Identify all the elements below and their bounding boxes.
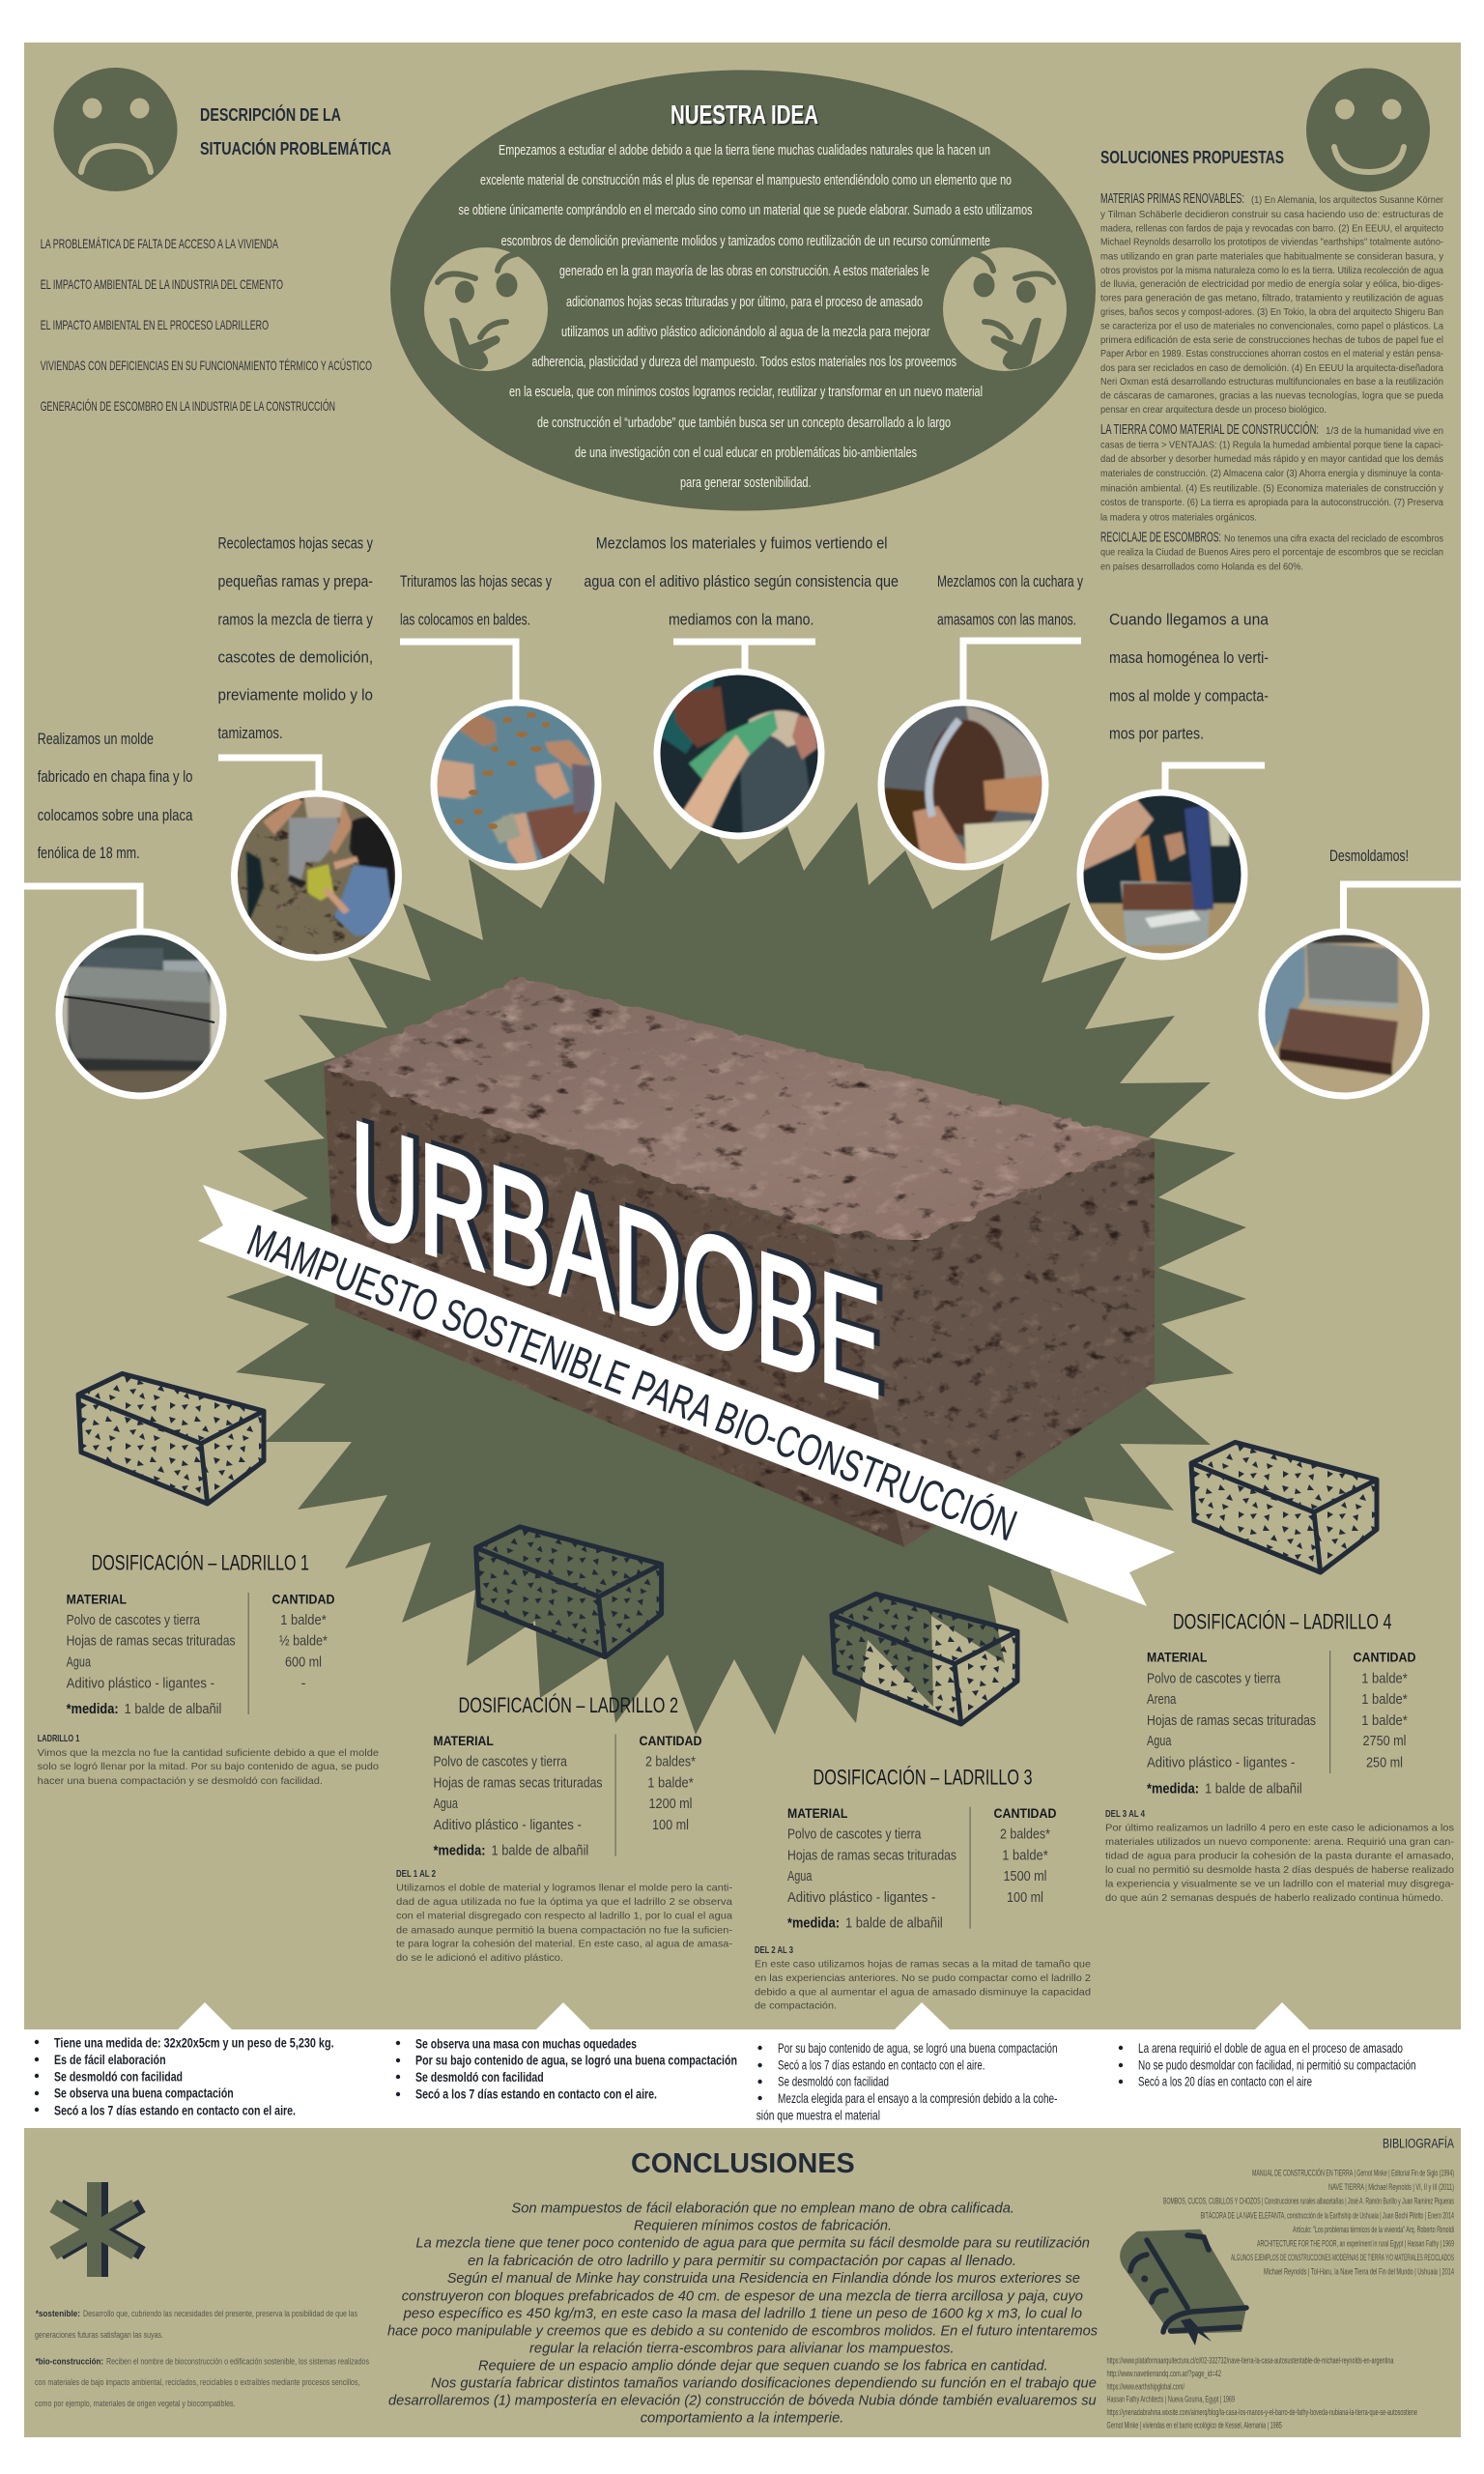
text: del 2 al 3 note	[755, 1944, 1091, 2012]
text: conclusiones body: hace poco manipulable y creemos que es debido a su contenido de escombros molidos. En el futuro intentaremos	[387, 2322, 1098, 2339]
dosage table: ladrillo 2: CANTIDAD	[640, 1733, 701, 1748]
text: del 3 al 4 note: lo cual no permitió su desmolde hasta 2 días después de haberse realizado	[1105, 1864, 1454, 1876]
starburst	[224, 801, 1246, 1735]
text: ladrillo 1 note: hacer una buena compactación y se desmoldó con facilidad.	[38, 1775, 323, 1787]
dosage table: ladrillo 1: Polvo de cascotes y tierra	[67, 1613, 201, 1628]
text: del 1 al 2 note: do se le adicionó el aditivo plástico.	[396, 1952, 563, 1964]
text: conclusiones body: Requieren mínimos costos de fabricación.	[634, 2217, 892, 2233]
photo 1: molde	[56, 928, 226, 1100]
text: soluciones propuestas body: que realiza la Ciudad de Buenos Aires pero el porcentaje de escombros que se reciclan	[1100, 547, 1443, 559]
dosage table: ladrillo 2: DOSIFICACIÓN – LADRILLO 2	[458, 1693, 678, 1717]
photo 6: compactado en molde	[1076, 789, 1248, 961]
text: del 1 al 2 note: de amasado aunque permitió la buena compactación no fue la suficien-	[396, 1924, 733, 1936]
text: soluciones propuestas body: casas de tierra > VENTAJAS: (1) Regula la humedad ambiental porque tiene la capaci-	[1100, 440, 1443, 451]
dosage table: ladrillo 1: ½ balde*	[279, 1634, 328, 1650]
bullet list 4	[1119, 2040, 1416, 2089]
bullet list 1: Se observa una buena compactación	[54, 2086, 234, 2101]
text: soluciones propuestas body: otros provistos por la misma naturaleza como lo es la tierra. Utiliza recolección de agua	[1100, 265, 1443, 276]
text: soluciones propuestas body: tores para generación de gas metano, filtrado, tratamiento y reutilización de aguas	[1100, 292, 1443, 303]
dosage table: ladrillo 1	[67, 1550, 334, 1717]
text: soluciones propuestas body: dad de absorber y desorber humedad más rápido y en mayor cantidad que los demás	[1100, 453, 1443, 465]
step 1 text: realizamos un molde: fabricado en chapa fina y lo	[38, 767, 193, 786]
list of problems	[41, 236, 372, 414]
dosage table: ladrillo 2: Aditivo plástico - ligantes -	[433, 1818, 582, 1833]
text: soluciones propuestas body: y Tilman Schäberle decidieron construir su casa haciendo uso de: estructuras de	[1100, 209, 1443, 220]
dosage table: ladrillo 1: 600 ml	[285, 1655, 322, 1671]
bullet list 2	[396, 2035, 737, 2102]
heading: descripción de la situación problemática: SITUACIÓN PROBLEMÁTICA	[200, 138, 391, 158]
text: del 3 al 4 note: Por último realizamos un ladrillo 4 pero en este caso le adicionamos a los	[1105, 1823, 1454, 1834]
step 6 text: cuando llegamos: Cuando llegamos a una	[1109, 611, 1269, 629]
bullet list 4: Secó a los 20 días en contacto con el aire	[1138, 2074, 1312, 2089]
dosage table: ladrillo 4: 2750 ml	[1362, 1734, 1407, 1749]
heading: descripción de la situación problemática	[200, 104, 391, 158]
dosage table: ladrillo 4: Arena	[1147, 1692, 1177, 1708]
text: conclusiones body: Nos gustaría fabricar distintos tamaños variando dosificaciones dependiendo su función en el trabajo que	[431, 2374, 1097, 2391]
icon: book	[1120, 2229, 1246, 2345]
dosage table: ladrillo 4: CANTIDAD	[1353, 1650, 1416, 1665]
icon: brick 1	[78, 1373, 264, 1504]
photo 7: desmolde	[1258, 928, 1430, 1100]
dosage table: ladrillo 1: CANTIDAD	[271, 1591, 334, 1606]
text: del 3 al 4 note: tidad de agua para producir la cohesión de la pasta durante el amasado,	[1105, 1851, 1454, 1862]
text: conclusiones body: Son mampuestos de fácil elaboración que no emplean mano de obra calificada.	[511, 2200, 1014, 2216]
list of problems: LA PROBLEMÁTICA DE FALTA DE ACCESO A LA VIVIENDA	[41, 236, 278, 251]
text: conclusiones body: comportamiento a la intemperie.	[641, 2410, 843, 2427]
text: conclusiones body: regular la relación tierra-escombros para alivianar los mampuestos.	[529, 2340, 955, 2356]
heading: bibliografía: BIBLIOGRAFÍA	[1383, 2137, 1454, 2151]
text: conclusiones body: desarrollaremos (1) mampostería en elevación (2) construcción de bóveda Nubia dónde también evaluaremos su	[388, 2393, 1097, 2409]
step 3 text: trituramos	[400, 572, 552, 628]
text: soluciones propuestas body	[1100, 191, 1444, 573]
web references: Hassan Fathy Architects | Nueva Gourna, Egypt | 1969	[1107, 2395, 1235, 2404]
dosage table: ladrillo 4: MATERIAL	[1147, 1650, 1208, 1665]
text: ladrillo 1 note: Vimos que la mezcla no fue la cantidad suficiente debido a que el molde	[38, 1747, 379, 1759]
text: soluciones propuestas body: costos de transporte. (6) La tierra es apropiada para la autoconstrucción. (7) Preserva	[1100, 497, 1443, 508]
dosage table: ladrillo 1: -	[301, 1676, 306, 1691]
text: nuestra idea paragraph: adherencia, plasticidad y dureza del mampuesto. Todos estos materiales nos los proveemos	[531, 355, 956, 370]
text: soluciones propuestas body: de lluvia, generación de electricidad por medio de energía solar y eólica, bio-diges-	[1100, 278, 1443, 290]
footnotes: como por ejemplo, materiales de origen vegetal y biocompatibles.	[35, 2399, 236, 2408]
text: nuestra idea paragraph: generado en la gran mayoría de las obras en construcción. A estos materiales le	[559, 264, 929, 279]
step 5 text: mezclamos con la cuchara: Mezclamos con la cuchara y	[937, 572, 1083, 590]
bullet list 3: Se desmoldó con facilidad	[778, 2074, 889, 2089]
dosage table: ladrillo 3: CANTIDAD	[993, 1805, 1057, 1821]
step 1 text: realizamos un molde: Realizamos un molde	[38, 730, 154, 748]
text: soluciones propuestas body: primera edificación de esta serie de construcciones hechas de tubos de papel fue el	[1100, 334, 1443, 346]
dosage table: ladrillo 3: MATERIAL	[787, 1805, 848, 1821]
dosage table: ladrillo 3	[787, 1765, 1057, 1932]
text: nuestra idea paragraph: adicionamos hojas secas trituradas y por último, para el proceso de amasado	[566, 295, 923, 310]
footnotes: *bio-construcción:	[36, 2357, 103, 2367]
bullet list 3: Por su bajo contenido de agua, se logró una buena compactación	[778, 2040, 1057, 2056]
text: del 3 al 4 note: DEL 3 AL 4	[1105, 1808, 1145, 1820]
title: urbadobe	[351, 1084, 887, 1431]
step 2 text: recolectamos: Recolectamos hojas secas y	[218, 534, 373, 553]
text: conclusiones body: La mezcla tiene que tener poco contenido de agua para que permita su fácil desmolde para su reutilización	[415, 2235, 1090, 2252]
subtitle: mampuesto sostenible para bio-construcción: MAMPUESTO SOSTENIBLE PARA BIO-CONSTRUCCIÓN	[241, 1215, 1023, 1550]
dosage table: ladrillo 4: 1 balde*	[1361, 1692, 1408, 1708]
dosage table: ladrillo 1: MATERIAL	[67, 1591, 127, 1606]
text: del 1 al 2 note: te para lograr la cohesión del material. En este caso, al agua de amasa-	[396, 1939, 733, 1950]
step 4 text: mezclamos materiales: agua con el aditivo plástico según consistencia que	[584, 572, 899, 590]
step 5 text: mezclamos con la cuchara: amasamos con las manos.	[937, 611, 1076, 629]
dosage table: ladrillo 4: Hojas de ramas secas trituradas	[1147, 1713, 1316, 1729]
dosage table: ladrillo 3: Polvo de cascotes y tierra	[787, 1827, 922, 1843]
dosage table: ladrillo 1: Aditivo plástico - ligantes -	[67, 1676, 214, 1691]
text: soluciones propuestas body: minación ambiental. (4) Es reutilizable. (5) Economiza materiales de construcción y	[1100, 483, 1444, 495]
bullet list 2: Se observa una masa con muchas oquedades	[415, 2035, 637, 2051]
dosage table: ladrillo 4: Aditivo plástico - ligantes -	[1147, 1756, 1296, 1771]
step 5 text: mezclamos con la cuchara	[937, 572, 1083, 629]
dosage table: ladrillo 2: 100 ml	[652, 1818, 689, 1833]
text: conclusiones body: peso específico es 450 kg/m3, en este caso la masa del ladrillo 1 tiene un peso de 1600 kg x m3, lo cual lo	[403, 2305, 1082, 2321]
bullet list 3: sión que muestra el material	[756, 2107, 880, 2122]
step 3 text: trituramos: Trituramos las hojas secas y	[400, 572, 552, 590]
dosage table: ladrillo 3: Aditivo plástico - ligantes -	[787, 1890, 936, 1906]
dosage table: ladrillo 1: Hojas de ramas secas trituradas	[67, 1634, 236, 1650]
text: soluciones propuestas body: RECICLAJE DE ESCOMBROS:	[1100, 530, 1221, 545]
text: del 3 al 4 note	[1105, 1808, 1455, 1904]
text: soluciones propuestas body: se caracteriza por el uso de materiales no convencionales, como papel o plásticos. La	[1100, 320, 1443, 331]
dosage table: ladrillo 1: 1 balde de albañil	[125, 1702, 221, 1717]
icon: brick 3	[832, 1594, 1017, 1724]
dosage table: ladrillo 3: *medida:	[787, 1916, 840, 1932]
conclusions panel background	[24, 2128, 1461, 2437]
text: conclusiones body: Según el manual de Minke hay construida una Residencia en Finlandia dónde los muros exteriores se	[447, 2270, 1080, 2287]
icon: thinking face left	[424, 247, 548, 371]
bullet list 1: Se desmoldó con facilidad	[54, 2068, 183, 2084]
icon: happy face	[1306, 68, 1430, 191]
text: soluciones propuestas body: de cáscaras de camarones, gracias a las nuevas tecnologías, logra que se pueda	[1100, 390, 1443, 402]
dosage table: ladrillo 1: *medida:	[67, 1702, 119, 1717]
text: nuestra idea paragraph: de construcción el “urbadobe” que también busca ser un concepto desarrollado a lo largo	[537, 416, 951, 431]
bullet list 3: Mezcla elegida para el ensayo a la compresión debido a la cohe-	[778, 2090, 1058, 2106]
text: soluciones propuestas body: 1/3 de la humanidad vive en	[1326, 425, 1443, 437]
text: conclusiones body: en la fabricación de otro ladrillo y para permitir su compactación por capas al llenado.	[468, 2253, 1016, 2269]
footnotes	[35, 2309, 369, 2408]
footnotes: Reciben el nombre de bioconstrucción o edificación sostenible, los sistemas realizados	[106, 2357, 369, 2367]
icon: asterisk	[49, 2182, 146, 2277]
photo 5: amasado	[873, 696, 1053, 876]
bibliography list	[1163, 2169, 1454, 2276]
dosage table: ladrillo 2: 2 baldes*	[645, 1755, 696, 1770]
text: soluciones propuestas body: materiales de construcción. (2) Almacena calor (3) Ahorra energía y disminuye la conta-	[1100, 468, 1443, 479]
main panel background	[24, 43, 1461, 2029]
step 2 text: recolectamos	[218, 534, 373, 742]
step 2 text: recolectamos: ramos la mezcla de tierra y	[218, 611, 373, 628]
heading: soluciones propuestas: SOLUCIONES PROPUESTAS	[1100, 147, 1284, 167]
text: del 2 al 3 note: de compactación.	[755, 2000, 837, 2012]
web references: http://www.navetierrandq.com.ar/?page_id=42	[1107, 2369, 1221, 2378]
list of problems: EL IMPACTO AMBIENTAL EN EL PROCESO LADRILLERO	[41, 317, 269, 332]
dosage table: ladrillo 4: 1 balde*	[1361, 1671, 1408, 1686]
heading: nuestra idea: NUESTRA IDEA	[672, 101, 819, 131]
step 2 text: recolectamos: tamizamos.	[218, 724, 283, 742]
dosage table: ladrillo 2	[433, 1693, 701, 1859]
text: nuestra idea paragraph: de una investigación con el cual educar en problemáticas bio-ambientales	[575, 446, 917, 461]
text: soluciones propuestas body: No tenemos una cifra exacta del reciclado de escombros	[1224, 532, 1443, 544]
icon: sad face	[54, 68, 178, 191]
footnotes: generaciones futuras satisfagan las suyas.	[35, 2330, 163, 2340]
photo 4: mezcla con agua	[649, 663, 829, 844]
step 3 text: trituramos: las colocamos en baldes.	[400, 611, 530, 628]
text: soluciones propuestas body: Michael Reynolds desarrollo los prototipos de viviendas "earthships" totalmente autóno-	[1100, 237, 1443, 248]
text: del 2 al 3 note: en las experiencias anteriores. No se pudo compactar como el ladrillo 2	[755, 1972, 1091, 1984]
dosage table: ladrillo 4: Polvo de cascotes y tierra	[1147, 1671, 1281, 1686]
step 6 text: cuando llegamos: mos por partes.	[1109, 725, 1204, 743]
dosage table: ladrillo 4: Agua	[1147, 1734, 1172, 1749]
text: soluciones propuestas body: LA TIERRA COMO MATERIAL DE CONSTRUCCIÓN:	[1100, 421, 1319, 438]
text: ladrillo 1 note	[38, 1733, 379, 1787]
footnotes: con materiales de bajo impacto ambiental, reciclados, reciclables o extraíbles mediante procesos sencillos,	[35, 2377, 359, 2387]
text: ladrillo 1 note: LADRILLO 1	[38, 1733, 80, 1744]
text: del 3 al 4 note: materiales utilizados un nuevo componente: arena. Requirió una gran can-	[1105, 1836, 1455, 1848]
icon: thinking face right	[943, 247, 1067, 371]
text: del 2 al 3 note: En este caso utilizamos hojas de ramas secas a la mitad de tamaño que	[755, 1959, 1091, 1971]
dosage table: ladrillo 3: Agua	[787, 1869, 813, 1884]
footnotes: Desarrollo que, cubriendo las necesidades del presente, preserva la posibilidad de que las	[83, 2309, 357, 2318]
dosage table: ladrillo 4: DOSIFICACIÓN – LADRILLO 4	[1173, 1610, 1391, 1634]
bullet list 1: Es de fácil elaboración	[54, 2052, 166, 2067]
step 6 text: cuando llegamos	[1109, 611, 1269, 743]
text: del 1 al 2 note: DEL 1 AL 2	[396, 1868, 436, 1880]
dosage table: ladrillo 2: 1 balde*	[647, 1775, 694, 1791]
step 6 text: cuando llegamos: masa homogénea lo verti-	[1109, 648, 1269, 667]
dosage table: ladrillo 3: 100 ml	[1007, 1890, 1043, 1906]
web references: https://www.earthshipglobal.com/	[1107, 2381, 1184, 2391]
ribbon with subtitle	[198, 1185, 1175, 1606]
dosage table: ladrillo 2: MATERIAL	[433, 1733, 494, 1748]
photo 3: triturado de hojas	[431, 700, 601, 870]
text: nuestra idea paragraph: excelente material de construcción más el plus de repensar el mampuesto entendiéndolo como un elemento que no	[480, 173, 1012, 188]
dosage table: ladrillo 3: DOSIFICACIÓN – LADRILLO 3	[813, 1765, 1032, 1789]
step 7 text: desmoldamos: Desmoldamos!	[1329, 847, 1409, 865]
step 4 text: mezclamos materiales	[584, 534, 899, 628]
text: del 1 al 2 note: con el material disgregado con respecto al ladrillo 1, por lo cual el agua	[396, 1911, 732, 1922]
text: soluciones propuestas body: la madera y otros materiales orgánicos.	[1100, 512, 1257, 524]
text: soluciones propuestas body: madera, rellenas con fardos de paja y revocadas con barro. (2) En EEUU, el arquitecto	[1100, 222, 1443, 234]
bullet list 3	[756, 2040, 1058, 2122]
text: nuestra idea paragraph: escombros de demolición previamente molidos y tamizados como reutilización de un recurso comúnmente	[501, 234, 990, 249]
dosage table: ladrillo 1: 1 balde*	[280, 1613, 327, 1628]
step connector lines	[24, 641, 1461, 933]
text: soluciones propuestas body: (1) En Alemania, los arquitectos Susanne Körner	[1251, 194, 1443, 206]
dosage table: ladrillo 3: Hojas de ramas secas trituradas	[787, 1848, 956, 1863]
dosage table: ladrillo 2: Polvo de cascotes y tierra	[433, 1755, 568, 1770]
heading: conclusiones: CONCLUSIONES	[631, 2148, 855, 2179]
dosage table: ladrillo 2: Hojas de ramas secas trituradas	[433, 1775, 603, 1791]
panel: nuestra idea	[390, 70, 1096, 510]
text: nuestra idea paragraph: Empezamos a estudiar el adobe debido a que la tierra tiene muchas cualidades naturales que la hacen un	[499, 143, 990, 158]
white pointer triangles	[178, 2002, 1309, 2029]
web references: Gernot Minke | viviendas en el barrio ecológico de Kessel, Alemania | 1985	[1107, 2420, 1282, 2430]
list of problems: VIVIENDAS CON DEFICIENCIAS EN SU FUNCIONAMIENTO TÉRMICO Y ACÚSTICO	[41, 358, 372, 373]
dosage table: ladrillo 2: Agua	[433, 1797, 459, 1812]
text: del 1 al 2 note: Utilizamos el doble de material y logramos llenar el molde pero la canti-	[396, 1883, 733, 1894]
text: nuestra idea paragraph: en la escuela, que con mínimos costos logramos reciclar, reutilizar y transformar en un nuevo material	[509, 385, 983, 400]
text: soluciones propuestas body: pensar en crear arquitectura desde un proceso biológico.	[1100, 404, 1327, 416]
step 1 text: realizamos un molde: fenólica de 18 mm.	[38, 844, 140, 862]
step 4 text: mezclamos materiales: mediamos con la mano.	[669, 611, 813, 628]
text: del 2 al 3 note: debido a que al aumentar el agua de amasado disminuye la capacidad	[755, 1986, 1091, 1998]
bullet list 2: Se desmoldó con facilidad	[415, 2069, 544, 2085]
text: soluciones propuestas body: en países desarrollados como Holanda es del 60%.	[1100, 561, 1303, 573]
dosage table: ladrillo 4: 1 balde de albañil	[1205, 1781, 1302, 1797]
title: urbadobe: URBADOBE	[357, 1084, 887, 1428]
text: del 3 al 4 note: la experiencia y visualmente se ve un ladrillo con el material muy disgrega-	[1105, 1879, 1455, 1890]
text: soluciones propuestas body: mas utilizando en gran parte materiales que habitualmente se consideran basura, y	[1100, 250, 1444, 262]
text: del 2 al 3 note: DEL 2 AL 3	[755, 1944, 793, 1956]
dosage table: ladrillo 3: 2 baldes*	[1000, 1827, 1050, 1843]
icon: brick 4	[1191, 1442, 1377, 1572]
step 2 text: recolectamos: cascotes de demolición,	[218, 648, 373, 667]
text: soluciones propuestas body: dos para ser reciclados en caso de demolición. (4) En EEUU la arquitecta-diseñadora	[1100, 362, 1443, 374]
text: del 3 al 4 note: do que aún 2 semanas después de haberlo realizado continua húmedo.	[1105, 1892, 1443, 1904]
icon: brick 2	[476, 1527, 662, 1656]
text: del 1 al 2 note	[396, 1868, 733, 1964]
step 1 text: realizamos un molde: colocamos sobre una placa	[38, 806, 193, 824]
text: conclusiones body: construyeron con bloques prefabricados de 40 cm. de espesor de una mezcla de tierra arcillosa y paja, cuyo	[402, 2287, 1083, 2304]
bullet list 2: Secó a los 7 días estando en contacto con el aire.	[415, 2086, 657, 2102]
dosage table: ladrillo 3: 1500 ml	[1003, 1869, 1047, 1884]
dosage table: ladrillo 2: *medida:	[433, 1844, 485, 1859]
step 6 text: cuando llegamos: mos al molde y compacta-	[1109, 687, 1269, 705]
dosage table: ladrillo 4	[1147, 1610, 1416, 1797]
heading: descripción de la situación problemática: DESCRIPCIÓN DE LA	[200, 104, 341, 125]
bullet list 1: Secó a los 7 días estando en contacto con el aire.	[54, 2102, 296, 2117]
dosage table: ladrillo 2: 1 balde de albañil	[491, 1844, 588, 1859]
text: soluciones propuestas body: grises, baños secos y compost-adores. (3) En Tokio, la obra del arquitecto Shigeru Ban	[1100, 306, 1443, 318]
dosage table: ladrillo 3: 1 balde*	[1002, 1848, 1048, 1863]
web references	[1107, 2356, 1417, 2430]
dosage table: ladrillo 3: 1 balde de albañil	[845, 1916, 943, 1932]
dosage table: ladrillo 1: Agua	[67, 1655, 92, 1671]
list of problems: GENERACIÓN DE ESCOMBRO EN LA INDUSTRIA DE LA CONSTRUCCIÓN	[41, 398, 335, 414]
bullet list 3: Secó a los 7 días estando en contacto con el aire.	[778, 2057, 985, 2073]
bullet list 2: Por su bajo contenido de agua, se logró una buena compactación	[415, 2053, 737, 2068]
list of problems: EL IMPACTO AMBIENTAL DE LA INDUSTRIA DEL CEMENTO	[41, 276, 283, 292]
step 2 text: recolectamos: previamente molido y lo	[218, 686, 373, 705]
adobe brick photo	[324, 976, 1155, 1547]
step 4 text: mezclamos materiales: Mezclamos los materiales y fuimos vertiendo el	[596, 534, 887, 553]
step 2 text: recolectamos: pequeñas ramas y prepa-	[218, 572, 373, 590]
title: urbadobe: URBADOBE	[351, 1087, 881, 1431]
text: nuestra idea paragraph: utilizamos un aditivo plástico adicionándolo al agua de la mezcla para mejorar	[561, 325, 930, 340]
text: conclusiones body	[387, 2200, 1098, 2427]
text: nuestra idea paragraph	[458, 143, 1032, 491]
heading: nuestra idea: NUESTRA IDEA	[671, 100, 818, 129]
photo 2: recolección de hojas	[227, 788, 406, 966]
text: nuestra idea paragraph: para generar sostenibilidad.	[680, 475, 812, 491]
dosage table: ladrillo 2: 1200 ml	[649, 1797, 692, 1812]
dosage table: ladrillo 4: 1 balde*	[1361, 1713, 1408, 1729]
footnotes: *sostenible:	[36, 2309, 80, 2318]
bullet list 1	[35, 2034, 334, 2117]
text: soluciones propuestas body: MATERIAS PRIMAS RENOVABLES:	[1100, 191, 1244, 207]
text: del 1 al 2 note: dad de agua utilizada no fue la óptima ya que el ladrillo 2 se observa	[396, 1896, 732, 1908]
text: nuestra idea paragraph: se obtiene únicamente comprándolo en el mercado sino como un material que se puede elaborar. Sumado a esto utilizamos	[458, 203, 1032, 218]
bullet list 1: Tiene una medida de: 32x20x5cm y un peso de 5,230 kg.	[54, 2034, 334, 2050]
dosage table: ladrillo 4: *medida:	[1147, 1781, 1199, 1797]
dosage table: ladrillo 4: 250 ml	[1366, 1756, 1403, 1771]
step 1 text: realizamos un molde	[38, 730, 193, 862]
text: conclusiones body: Requiere de un espacio amplio dónde dejar que sequen cuando se los fabrica en cantidad.	[478, 2357, 1048, 2373]
dosage table: ladrillo 1: DOSIFICACIÓN – LADRILLO 1	[92, 1550, 309, 1575]
text: soluciones propuestas body: Neri Oxman está desarrollando estructuras multifuncionales en base a la reutilización	[1100, 376, 1443, 388]
text: ladrillo 1 note: solo se logró llenar por la mitad. Por su bajo contenido de agua, se pudo	[38, 1761, 379, 1772]
